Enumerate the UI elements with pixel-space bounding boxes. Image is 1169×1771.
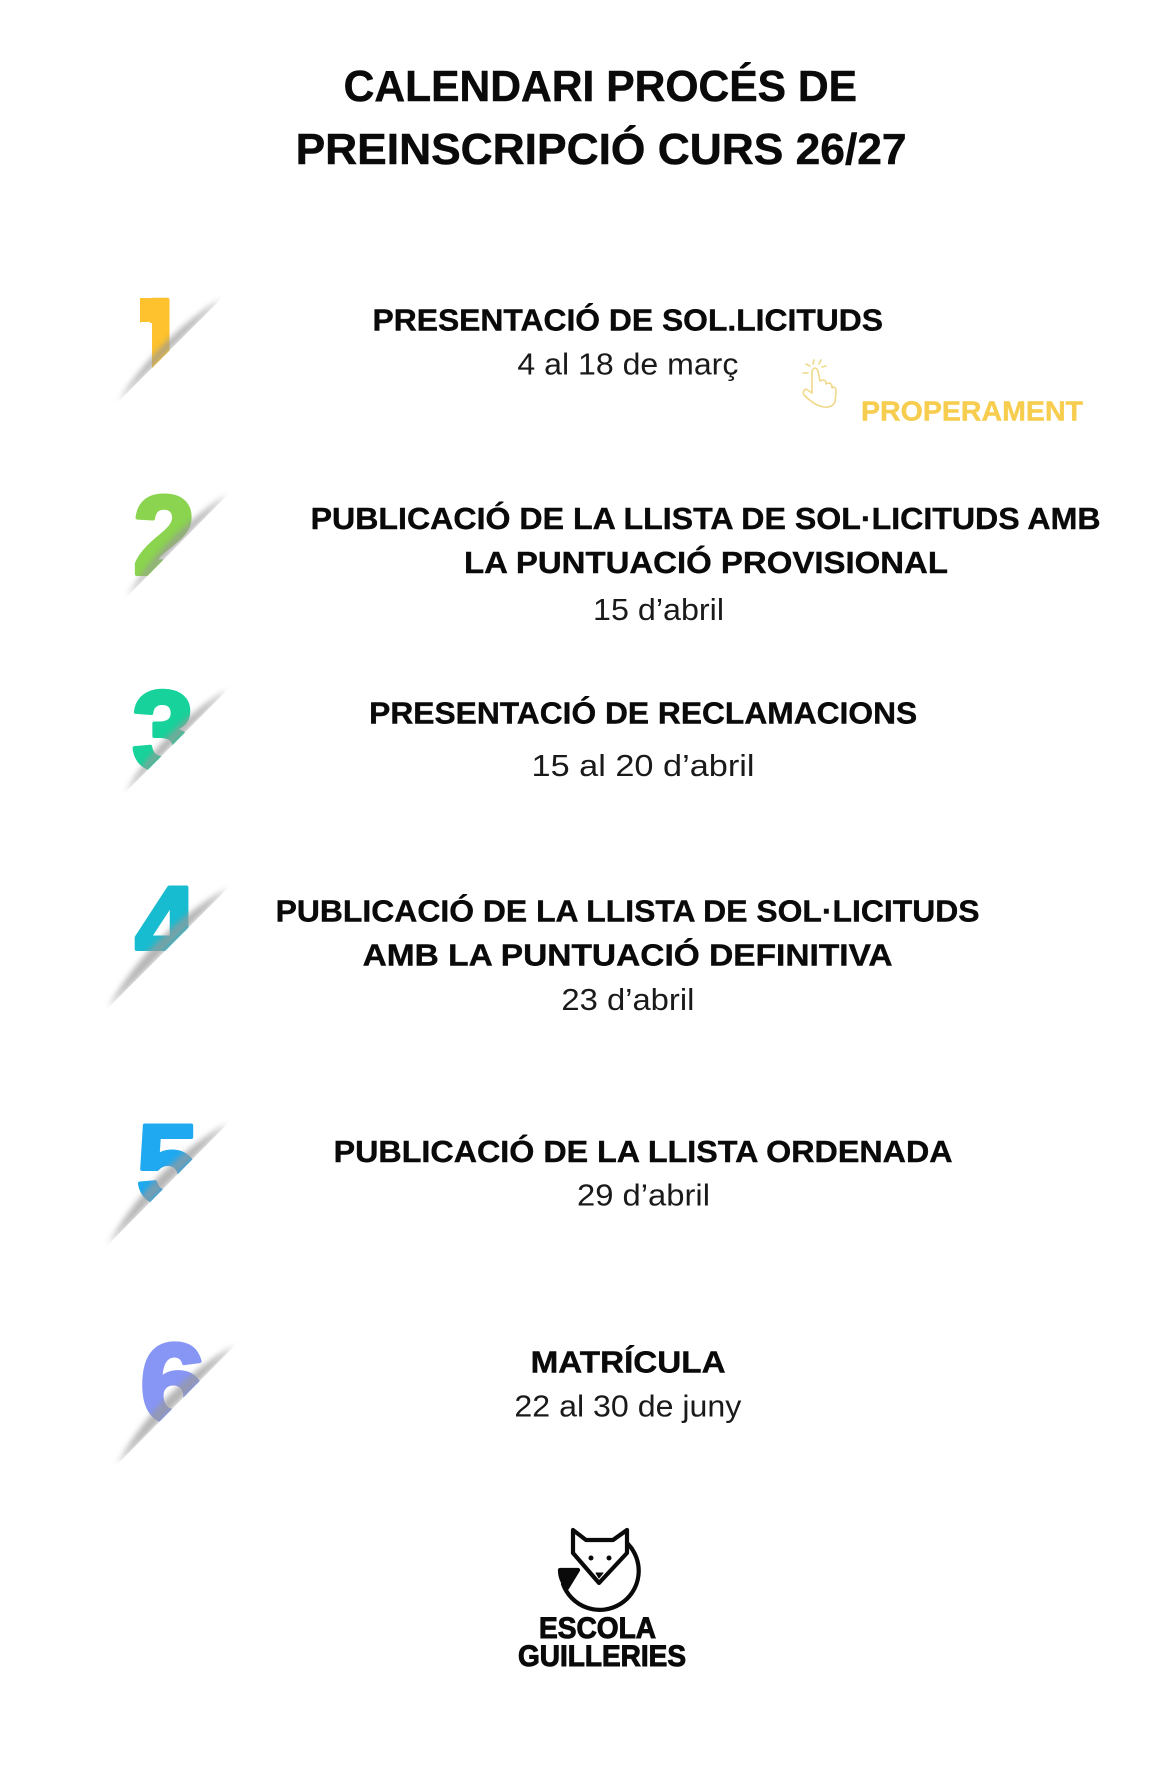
label: properament: PROPERAMENT [861, 396, 1083, 427]
logo: Escola Guilleries: GUILLERIES [518, 1640, 686, 1673]
panel: step 2: LA PUNTUACIÓ PROVISIONAL [464, 544, 948, 580]
number 5 [109, 1124, 226, 1242]
logo: Escola Guilleries [518, 1530, 686, 1673]
number 3 [126, 688, 225, 790]
panel: step 2 [128, 494, 1100, 620]
date: 4 al 18 de març [517, 346, 738, 382]
panel: step 4: AMB LA PUNTUACIÓ DEFINITIVA [363, 936, 893, 972]
panel: step 4 [109, 886, 978, 1010]
date: 15 d’abril [593, 592, 724, 627]
heading: PRESENTACIÓ DE RECLAMACIONS [369, 695, 917, 731]
heading: MATRÍCULA [531, 1345, 726, 1380]
title: PREINSCRIPCIÓ CURS 26/27 [296, 124, 907, 174]
number 4 [109, 886, 226, 1006]
date: 29 d’abril [577, 1178, 710, 1213]
number 2 [128, 494, 225, 594]
panel: step 6 [118, 1341, 742, 1462]
number 1 [120, 298, 219, 399]
heading: PUBLICACIÓ DE LA LLISTA ORDENADA [334, 1133, 953, 1169]
date: 23 d’abril [561, 982, 694, 1017]
title: CALENDARI PROCÉS DE [344, 61, 857, 111]
number 2: 2 [133, 473, 195, 598]
panel: step 3 [126, 688, 916, 790]
date: 22 al 30 de juny [514, 1388, 742, 1423]
title [296, 61, 907, 174]
icon: fox [560, 1530, 639, 1610]
number 5: 5 [136, 1102, 199, 1227]
panel: step 1 [120, 298, 1083, 421]
heading: PUBLICACIÓ DE LA LLISTA DE SOL·LICITUDS [276, 892, 980, 928]
heading: PUBLICACIÓ DE LA LLISTA DE SOL·LICITUDS AMB [311, 500, 1101, 536]
heading: PRESENTACIÓ DE SOL.LICITUDS [372, 302, 883, 338]
number 6 [118, 1341, 233, 1462]
icon: pointing hand [803, 360, 836, 407]
number 6: 6 [140, 1321, 206, 1446]
number 4: 4 [135, 864, 197, 989]
date: 15 al 20 d’abril [532, 748, 754, 783]
logo wordmark: ESCOLA [539, 1612, 656, 1645]
number 3: 3 [132, 668, 194, 793]
number 1: 1 [126, 276, 188, 401]
panel: step 5 [109, 1124, 952, 1242]
